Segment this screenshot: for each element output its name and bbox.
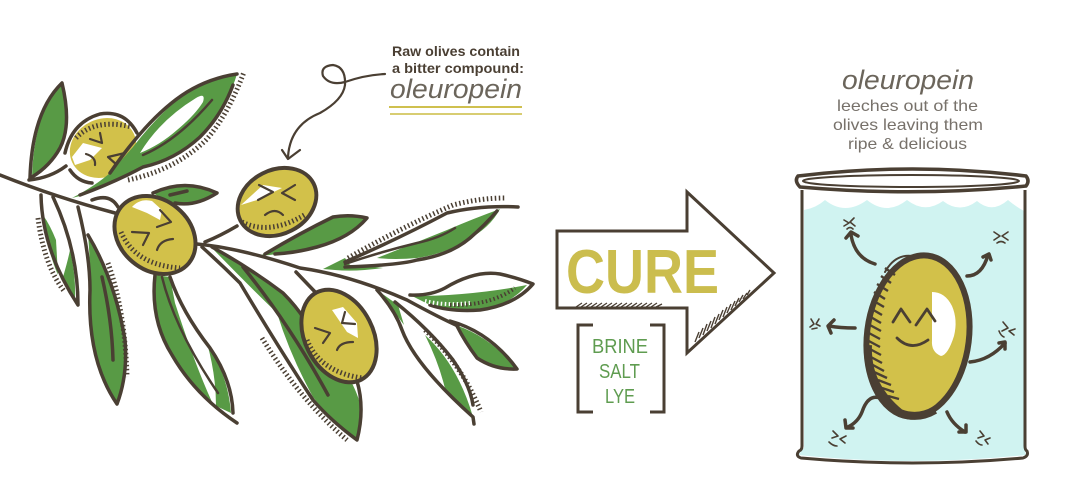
arrow: right: [970, 342, 1005, 362]
leaf: upper left small: [29, 83, 67, 180]
callout word oleuropein: oleuropein: [390, 74, 522, 104]
heading word oleuropein: oleuropein: [842, 65, 974, 95]
olive branch illustration: [0, 72, 533, 440]
small face: upper left: [844, 218, 855, 229]
bracketed curing methods: [578, 325, 664, 412]
leaf: small above branch: [260, 216, 367, 256]
leaf: lower center: [154, 275, 237, 423]
stem to lower right olive: [296, 272, 318, 295]
bracket right: [650, 325, 664, 412]
leaf: lower right hanging: [377, 290, 481, 424]
callout text line one: Raw olives contain: [392, 43, 520, 59]
heading text above can: [833, 65, 983, 153]
method: brine: BRINE: [592, 336, 648, 358]
stems to olives: [205, 226, 237, 242]
leaf: large lower right: [202, 247, 362, 440]
leaf: long upper right: [323, 198, 518, 271]
leaf: upper long: [72, 72, 244, 198]
stem curl above centre olive: [92, 198, 118, 207]
small face: upper right: [994, 232, 1008, 243]
leaf: left hanging: [38, 195, 78, 305]
arrow: left: [828, 320, 855, 333]
leaf: long center left: [78, 207, 127, 404]
arrow: down right: [947, 412, 966, 432]
olive: upper middle: [226, 155, 328, 249]
arrow hatching: [576, 290, 750, 342]
description line three: ripe & delicious: [848, 136, 967, 153]
olive: top left: [60, 107, 146, 189]
can rim: [796, 169, 1028, 192]
description line one: leeches out of the: [837, 98, 978, 115]
label: CURE: CURE: [566, 238, 719, 307]
double underline: [389, 106, 522, 115]
method: lye: LYE: [605, 386, 635, 408]
callout: raw olives: [389, 43, 524, 115]
arrow: down left: [845, 397, 880, 428]
small face: lower left: [829, 431, 846, 446]
olive: centre: [99, 180, 211, 290]
arrow: cure: [557, 192, 774, 353]
can of brine: [796, 169, 1028, 463]
leaf: small near centre olive: [153, 186, 217, 204]
main stem left: [0, 175, 115, 213]
smiling olive: [858, 249, 978, 423]
leaf: right: [410, 273, 533, 310]
arrow: up left: [846, 232, 875, 264]
small face: left: [810, 319, 820, 329]
leaf: far right tip: [450, 321, 517, 369]
bracket left: [578, 325, 593, 412]
description line two: olives leaving them: [833, 117, 983, 134]
olive: lower right: [286, 277, 392, 395]
curly arrow to olive: [282, 65, 385, 159]
small face: lower right: [976, 431, 990, 445]
small face: right: [999, 322, 1015, 337]
method: salt: SALT: [599, 361, 640, 383]
branch stem right: [197, 244, 458, 326]
callout text line two: a bitter compound:: [392, 60, 524, 76]
can sides and base: [797, 190, 1028, 463]
arrow: up right: [967, 254, 991, 276]
water: [798, 200, 1026, 461]
